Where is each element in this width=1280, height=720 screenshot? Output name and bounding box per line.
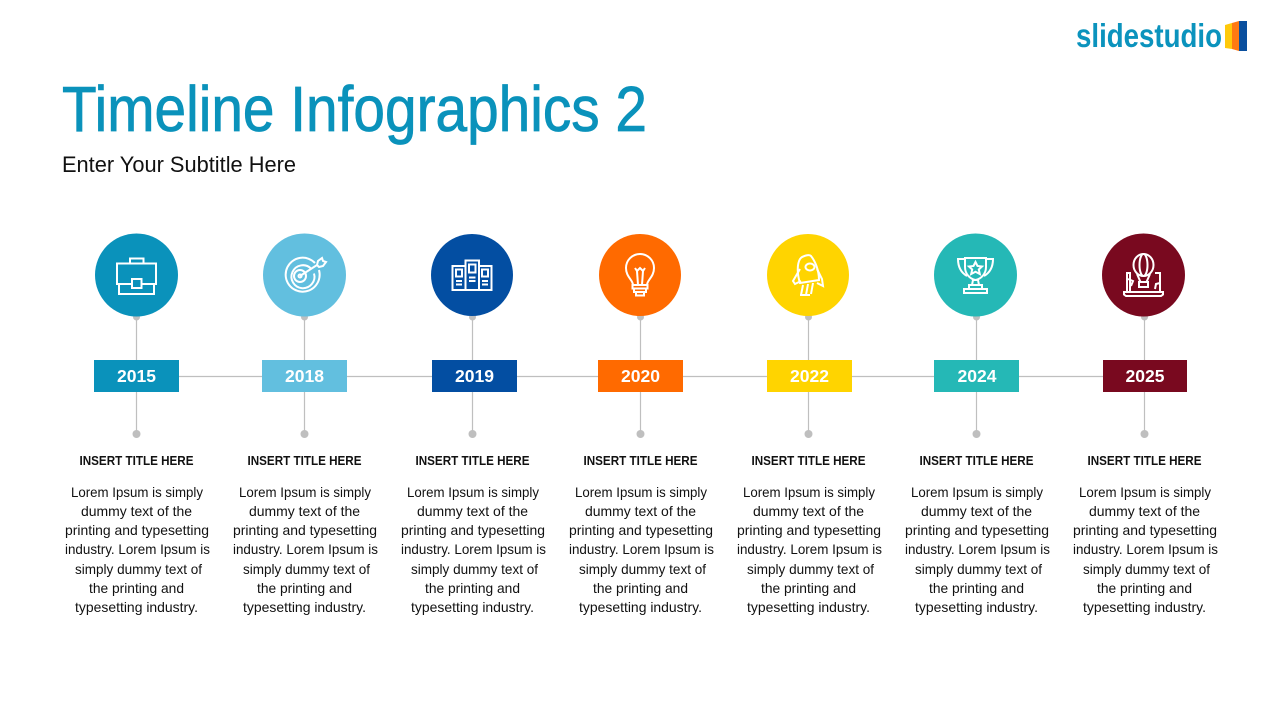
item description: printing and typesetting xyxy=(401,522,545,538)
item title: INSERT TITLE HERE xyxy=(248,453,362,468)
column: 2022 xyxy=(737,234,882,615)
item description: dummy text of the xyxy=(585,503,696,519)
item description xyxy=(569,484,714,615)
connector xyxy=(636,314,644,438)
circle badge xyxy=(263,234,346,316)
connector xyxy=(468,314,476,438)
connector xyxy=(1140,314,1148,438)
item description: the printing and xyxy=(89,580,184,596)
item description: printing and typesetting xyxy=(233,522,377,538)
item description: printing and typesetting xyxy=(905,522,1049,538)
item description: industry. Lorem Ipsum is xyxy=(233,541,378,557)
item description: printing and typesetting xyxy=(1073,522,1217,538)
item title: INSERT TITLE HERE xyxy=(416,453,530,468)
year label: 2018 xyxy=(285,366,324,386)
connector xyxy=(300,314,308,438)
item description: industry. Lorem Ipsum is xyxy=(569,541,714,557)
icon: balloon over laptop xyxy=(1124,254,1163,296)
item description: simply dummy text of xyxy=(411,561,538,577)
item description: industry. Lorem Ipsum is xyxy=(737,541,882,557)
item description: typesetting industry. xyxy=(1083,599,1206,615)
column: 2025 xyxy=(1073,234,1218,615)
year label: 2022 xyxy=(790,366,829,386)
circle badge xyxy=(95,234,178,316)
item description: Lorem Ipsum is simply xyxy=(239,484,371,500)
item description: typesetting industry. xyxy=(75,599,198,615)
icon: briefcase xyxy=(117,258,156,294)
item description xyxy=(1073,484,1218,615)
item description: typesetting industry. xyxy=(747,599,870,615)
item description: Lorem Ipsum is simply xyxy=(575,484,707,500)
item title: INSERT TITLE HERE xyxy=(80,453,194,468)
item description: simply dummy text of xyxy=(243,561,370,577)
circle badge xyxy=(767,234,849,316)
item description: typesetting industry. xyxy=(579,599,702,615)
item description: industry. Lorem Ipsum is xyxy=(905,541,1050,557)
item description xyxy=(401,484,546,615)
year box xyxy=(432,360,517,392)
item description: dummy text of the xyxy=(1089,503,1200,519)
year box xyxy=(94,360,179,392)
year label: 2025 xyxy=(1126,366,1165,386)
item description: typesetting industry. xyxy=(243,599,366,615)
year box xyxy=(1103,360,1187,392)
item description: dummy text of the xyxy=(249,503,360,519)
circle badge xyxy=(934,234,1017,316)
circle badge xyxy=(431,234,513,316)
item title: INSERT TITLE HERE xyxy=(920,453,1034,468)
year label: 2020 xyxy=(621,366,660,386)
item title: INSERT TITLE HERE xyxy=(584,453,698,468)
item description: industry. Lorem Ipsum is xyxy=(401,541,546,557)
item description: industry. Lorem Ipsum is xyxy=(65,541,210,557)
item description: dummy text of the xyxy=(921,503,1032,519)
item description xyxy=(65,484,210,615)
item description: Lorem Ipsum is simply xyxy=(743,484,875,500)
subtitle: Enter Your Subtitle Here xyxy=(62,152,296,177)
item description xyxy=(905,484,1050,615)
item description: the printing and xyxy=(1097,580,1192,596)
item description: printing and typesetting xyxy=(65,522,209,538)
icon: light bulb xyxy=(626,254,654,296)
column: 2019 xyxy=(401,234,546,615)
connector xyxy=(804,314,812,438)
icon: target xyxy=(286,258,326,292)
item description: Lorem Ipsum is simply xyxy=(1079,484,1211,500)
icon: trophy xyxy=(958,258,993,293)
icon: buildings xyxy=(452,260,492,290)
item description: simply dummy text of xyxy=(1083,561,1210,577)
year label: 2019 xyxy=(455,366,494,386)
timeline axis line xyxy=(136,376,1144,378)
connector xyxy=(132,314,140,438)
item description: Lorem Ipsum is simply xyxy=(407,484,539,500)
item description: simply dummy text of xyxy=(75,561,202,577)
item description: dummy text of the xyxy=(81,503,192,519)
item title: INSERT TITLE HERE xyxy=(1088,453,1202,468)
year box xyxy=(934,360,1019,392)
column: 2018 xyxy=(233,234,378,615)
item description: Lorem Ipsum is simply xyxy=(71,484,203,500)
item description: the printing and xyxy=(929,580,1024,596)
year box xyxy=(598,360,683,392)
column: 2015 xyxy=(65,234,210,615)
year label: 2024 xyxy=(958,366,997,386)
column: 2024 xyxy=(905,234,1050,615)
circle badge xyxy=(599,234,681,316)
item description: Lorem Ipsum is simply xyxy=(911,484,1043,500)
item title: INSERT TITLE HERE xyxy=(752,453,866,468)
item description: typesetting industry. xyxy=(915,599,1038,615)
item description: the printing and xyxy=(761,580,856,596)
column: 2020 xyxy=(569,234,714,615)
item description: dummy text of the xyxy=(417,503,528,519)
item description: the printing and xyxy=(593,580,688,596)
item description: typesetting industry. xyxy=(411,599,534,615)
item description: simply dummy text of xyxy=(747,561,874,577)
item description: industry. Lorem Ipsum is xyxy=(1073,541,1218,557)
circle badge xyxy=(1102,234,1185,316)
item description: the printing and xyxy=(425,580,520,596)
title: Timeline Infographics 2 xyxy=(62,73,647,145)
connector xyxy=(972,314,980,438)
item description: simply dummy text of xyxy=(915,561,1042,577)
year box xyxy=(767,360,852,392)
year label: 2015 xyxy=(117,366,156,386)
item description: simply dummy text of xyxy=(579,561,706,577)
item description xyxy=(233,484,378,615)
icon: rocket xyxy=(793,255,823,295)
item description: printing and typesetting xyxy=(737,522,881,538)
item description: printing and typesetting xyxy=(569,522,713,538)
item description: the printing and xyxy=(257,580,352,596)
year box xyxy=(262,360,347,392)
item description xyxy=(737,484,882,615)
item description: dummy text of the xyxy=(753,503,864,519)
logo: slidestudio: slidestudio xyxy=(1076,17,1222,54)
